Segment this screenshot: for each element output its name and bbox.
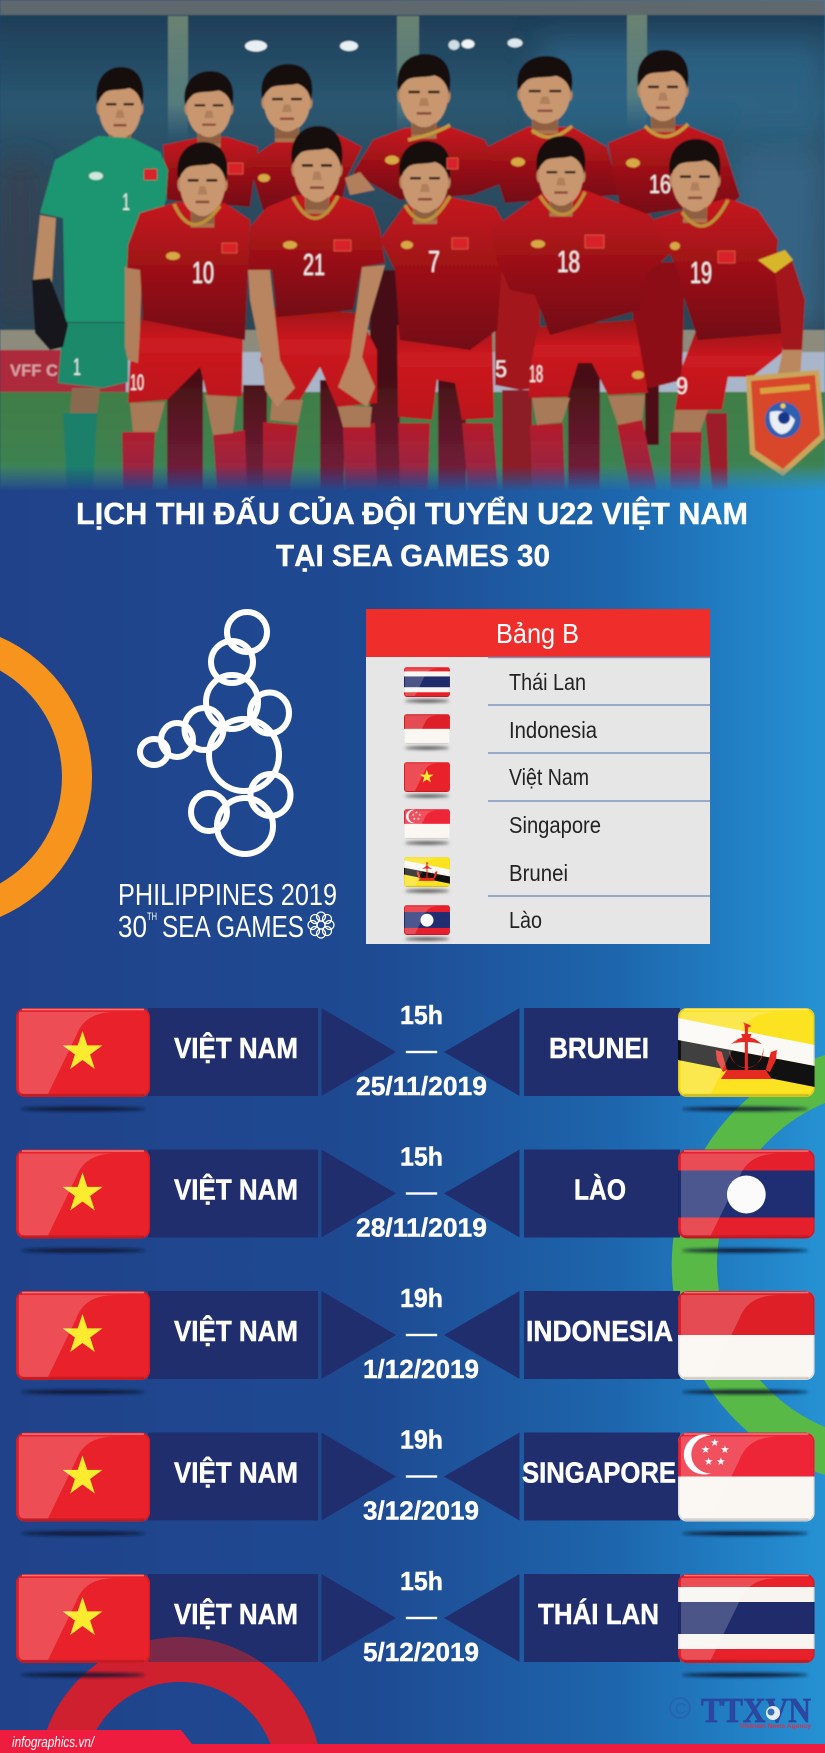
time and date: 1/12/2019 — [363, 1354, 479, 1384]
copyright mark — [670, 1698, 690, 1718]
team bands and arrows — [148, 1432, 680, 1520]
flag: Brunei — [678, 1008, 815, 1111]
team photo — [0, 0, 825, 490]
match 1: Việt Nam vs Brunei — [16, 1000, 815, 1111]
back row legs — [167, 250, 685, 490]
team names: THÁI LAN — [538, 1597, 659, 1631]
player 10: 10 — [192, 255, 214, 290]
back row heads — [96, 50, 689, 150]
team bands and arrows — [148, 1291, 680, 1379]
player 18: 18 — [557, 244, 580, 279]
red ring seen through band — [148, 1637, 260, 1662]
red ring — [40, 1637, 320, 1753]
flag: Lào — [678, 1150, 815, 1252]
player 10: 10 — [130, 370, 144, 395]
time and date: 19h — [400, 1283, 443, 1313]
copyright mark: C — [675, 1701, 687, 1718]
back row arm skin — [345, 172, 375, 195]
team names: INDONESIA — [526, 1316, 673, 1348]
team names: VIỆT NAM — [174, 1597, 298, 1631]
time and date: 5/12/2019 — [363, 1637, 479, 1667]
player 21: 21 — [303, 247, 325, 282]
team bands and arrows — [148, 1150, 680, 1238]
player 10 — [122, 202, 250, 490]
logo text: PHILIPPINES 2019 — [118, 877, 337, 912]
flag: Việt Nam — [16, 1432, 150, 1536]
team names: SINGAPORE — [522, 1458, 676, 1490]
flag: Singapore — [678, 1432, 815, 1536]
match 2: Việt Nam vs Lào — [16, 1142, 815, 1252]
player 19 — [652, 198, 805, 490]
icon: linked rings — [140, 612, 290, 854]
row: Singapore — [404, 809, 601, 844]
player 18: 5 — [495, 356, 507, 383]
flag: Việt Nam — [16, 1291, 150, 1394]
title: LỊCH THI ĐẤU CỦA ĐỘI TUYỂN U22 VIỆT NAM — [76, 495, 748, 531]
player 7 — [380, 197, 505, 490]
team bands and arrows — [148, 1574, 680, 1662]
orange ring — [0, 637, 92, 917]
team names — [174, 1172, 626, 1206]
row: Thái Lan: Thái Lan — [509, 669, 586, 695]
SEA Games logo — [118, 612, 337, 944]
player 7: 7 — [428, 244, 440, 279]
team names: VIỆT NAM — [174, 1314, 298, 1348]
time and date: 15h — [400, 1000, 443, 1030]
team names — [174, 1031, 649, 1065]
icon: globe — [766, 1706, 780, 1720]
flag: Việt Nam — [16, 1574, 150, 1677]
title: TẠI SEA GAMES 30 — [276, 538, 550, 573]
row: Indonesia: Indonesia — [509, 717, 597, 743]
goalkeeper — [32, 136, 168, 490]
row: Lào: Lào — [509, 907, 542, 933]
player 21 — [248, 195, 385, 490]
footer band — [0, 1730, 825, 1753]
logo text — [118, 877, 337, 944]
time and date: 25/11/2019 — [356, 1071, 487, 1101]
back row number 16: 16 — [649, 169, 671, 199]
time and date: 15h — [400, 1142, 443, 1172]
back row shirts — [163, 125, 740, 217]
flag: Việt Nam — [16, 1150, 150, 1252]
table header — [366, 609, 710, 657]
time and date: 19h — [400, 1424, 443, 1454]
time and date — [363, 1424, 479, 1526]
header text: Bảng B — [496, 618, 579, 649]
team names — [174, 1597, 659, 1631]
logo text: SEA GAMES — [162, 909, 304, 944]
team bands and arrows — [148, 1008, 680, 1096]
team names: VIỆT NAM — [174, 1456, 298, 1490]
team names: LÀO — [574, 1172, 626, 1206]
time and date — [363, 1283, 479, 1384]
team names: VIỆT NAM — [174, 1172, 298, 1206]
pennant — [746, 370, 825, 476]
row: Brunei: Brunei — [509, 860, 568, 886]
goalkeeper: 1 — [122, 189, 130, 216]
row: Indonesia — [404, 714, 597, 750]
panel: Bảng B group table — [366, 609, 710, 944]
player 18: 18 — [529, 361, 543, 388]
title — [76, 495, 748, 573]
row: Việt Nam: Việt Nam — [509, 764, 589, 790]
stadium background: VFF C — [10, 361, 58, 380]
agency name: TTXVN — [701, 1691, 811, 1730]
flag: Indonesia — [678, 1291, 815, 1394]
team names — [174, 1314, 673, 1348]
flag: Việt Nam — [16, 1008, 150, 1111]
player 19: 9 — [676, 373, 688, 400]
front row heads — [177, 126, 720, 227]
row: Lào — [404, 905, 542, 940]
time and date: 3/12/2019 — [363, 1496, 479, 1526]
time and date — [363, 1566, 479, 1667]
table body — [366, 609, 710, 944]
row: Brunei — [404, 857, 568, 892]
time and date — [356, 1000, 487, 1101]
player 18 — [490, 190, 675, 490]
green ring — [672, 1055, 825, 1475]
tagline: Vietnam News Agency — [740, 1724, 812, 1730]
team names: VIỆT NAM — [174, 1031, 298, 1065]
goalkeeper: 1 — [73, 354, 81, 381]
match 5: Việt Nam vs Thái Lan — [16, 1570, 815, 1680]
player 19: 19 — [690, 255, 712, 290]
time and date: 15h — [400, 1566, 443, 1596]
TTXVN logo — [670, 1691, 812, 1730]
logo text: 30 — [118, 909, 147, 944]
footer text: infographics.vn/ — [12, 1734, 95, 1751]
row: Việt Nam — [404, 762, 589, 798]
team names: BRUNEI — [549, 1033, 649, 1065]
stadium background — [0, 0, 825, 490]
flag: Thái Lan — [678, 1574, 815, 1677]
shirt badges and crests — [166, 156, 735, 379]
front row collars — [174, 192, 728, 226]
icon: flower — [308, 912, 334, 938]
team names — [174, 1456, 676, 1490]
row: Singapore: Singapore — [509, 812, 601, 838]
time and date — [356, 1142, 487, 1242]
match 3: Việt Nam vs Indonesia — [16, 1283, 815, 1394]
row: Thái Lan — [404, 667, 586, 702]
logo text: TH — [147, 911, 157, 923]
back row collars — [408, 124, 688, 140]
time and date: 28/11/2019 — [356, 1212, 487, 1242]
match 4: Việt Nam vs Singapore — [16, 1424, 815, 1536]
